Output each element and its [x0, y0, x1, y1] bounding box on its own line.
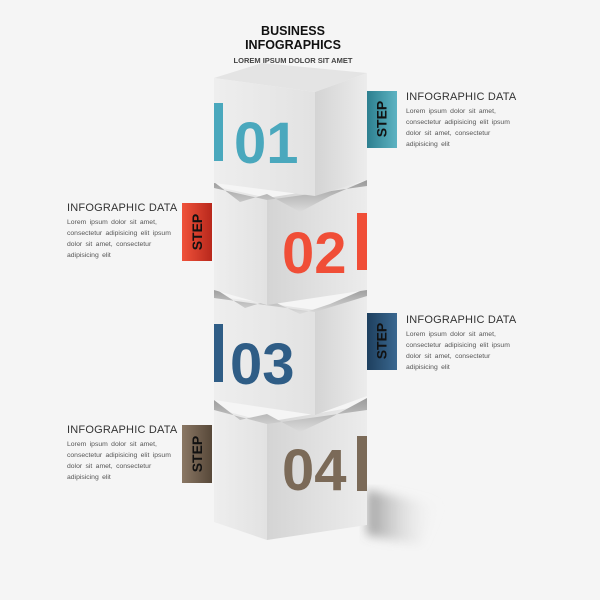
step tag 2 [182, 203, 212, 261]
text block 3: INFOGRAPHIC DATA [406, 314, 516, 326]
cube 3 [214, 288, 367, 415]
text block 3: adipisicing elit [406, 364, 450, 371]
step tag 1: STEP [374, 101, 390, 137]
text block 4: INFOGRAPHIC DATA [67, 424, 177, 436]
text block 1 [406, 91, 516, 148]
text block 3: consectetur adipisicing elit ipsum [406, 342, 510, 349]
cube 3: 03 [230, 332, 295, 397]
text block 3: Lorem ipsum dolor sit amet, [406, 331, 496, 338]
step tag 2: STEP [189, 214, 205, 250]
text block 1: Lorem ipsum dolor sit amet, [406, 108, 496, 115]
subtitle: LOREM IPSUM DOLOR SIT AMET [234, 56, 352, 65]
text block 1: consectetur adipisicing elit ipsum [406, 119, 510, 126]
text block 1: dolor sit amet, consectetur [406, 130, 490, 137]
text block 1: adipisicing elit [406, 141, 450, 148]
text block 2: INFOGRAPHIC DATA [67, 202, 177, 214]
cube 1: 01 [234, 111, 299, 176]
step tag 1 [367, 91, 397, 148]
cube 1 [214, 63, 367, 196]
shadow [367, 490, 440, 545]
step tag 3: STEP [374, 323, 390, 359]
step tag 4: STEP [189, 436, 205, 472]
text block 2: dolor sit amet, consectetur [67, 241, 151, 248]
text block 4: consectetur adipisicing elit ipsum [67, 452, 171, 459]
cube 4: 04 [282, 438, 347, 503]
cube 2 [214, 180, 367, 305]
text block 2 [67, 202, 178, 259]
text block 2: consectetur adipisicing elit ipsum [67, 230, 171, 237]
text block 1: INFOGRAPHIC DATA [406, 91, 516, 103]
cube 2: 02 [282, 221, 347, 286]
title [245, 24, 341, 52]
text block 4 [67, 424, 178, 481]
text block 3: dolor sit amet, consectetur [406, 353, 490, 360]
step tag 4 [182, 425, 212, 483]
text block 2: Lorem ipsum dolor sit amet, [67, 219, 157, 226]
text block 4: dolor sit amet, consectetur [67, 463, 151, 470]
step tag 3 [367, 313, 397, 370]
text block 4: Lorem ipsum dolor sit amet, [67, 441, 157, 448]
title: BUSINESS [261, 24, 325, 38]
title: INFOGRAPHICS [245, 38, 341, 52]
text block 2: adipisicing elit [67, 252, 111, 259]
cube 4 [214, 398, 367, 540]
text block 3 [406, 314, 516, 371]
text block 4: adipisicing elit [67, 474, 111, 481]
